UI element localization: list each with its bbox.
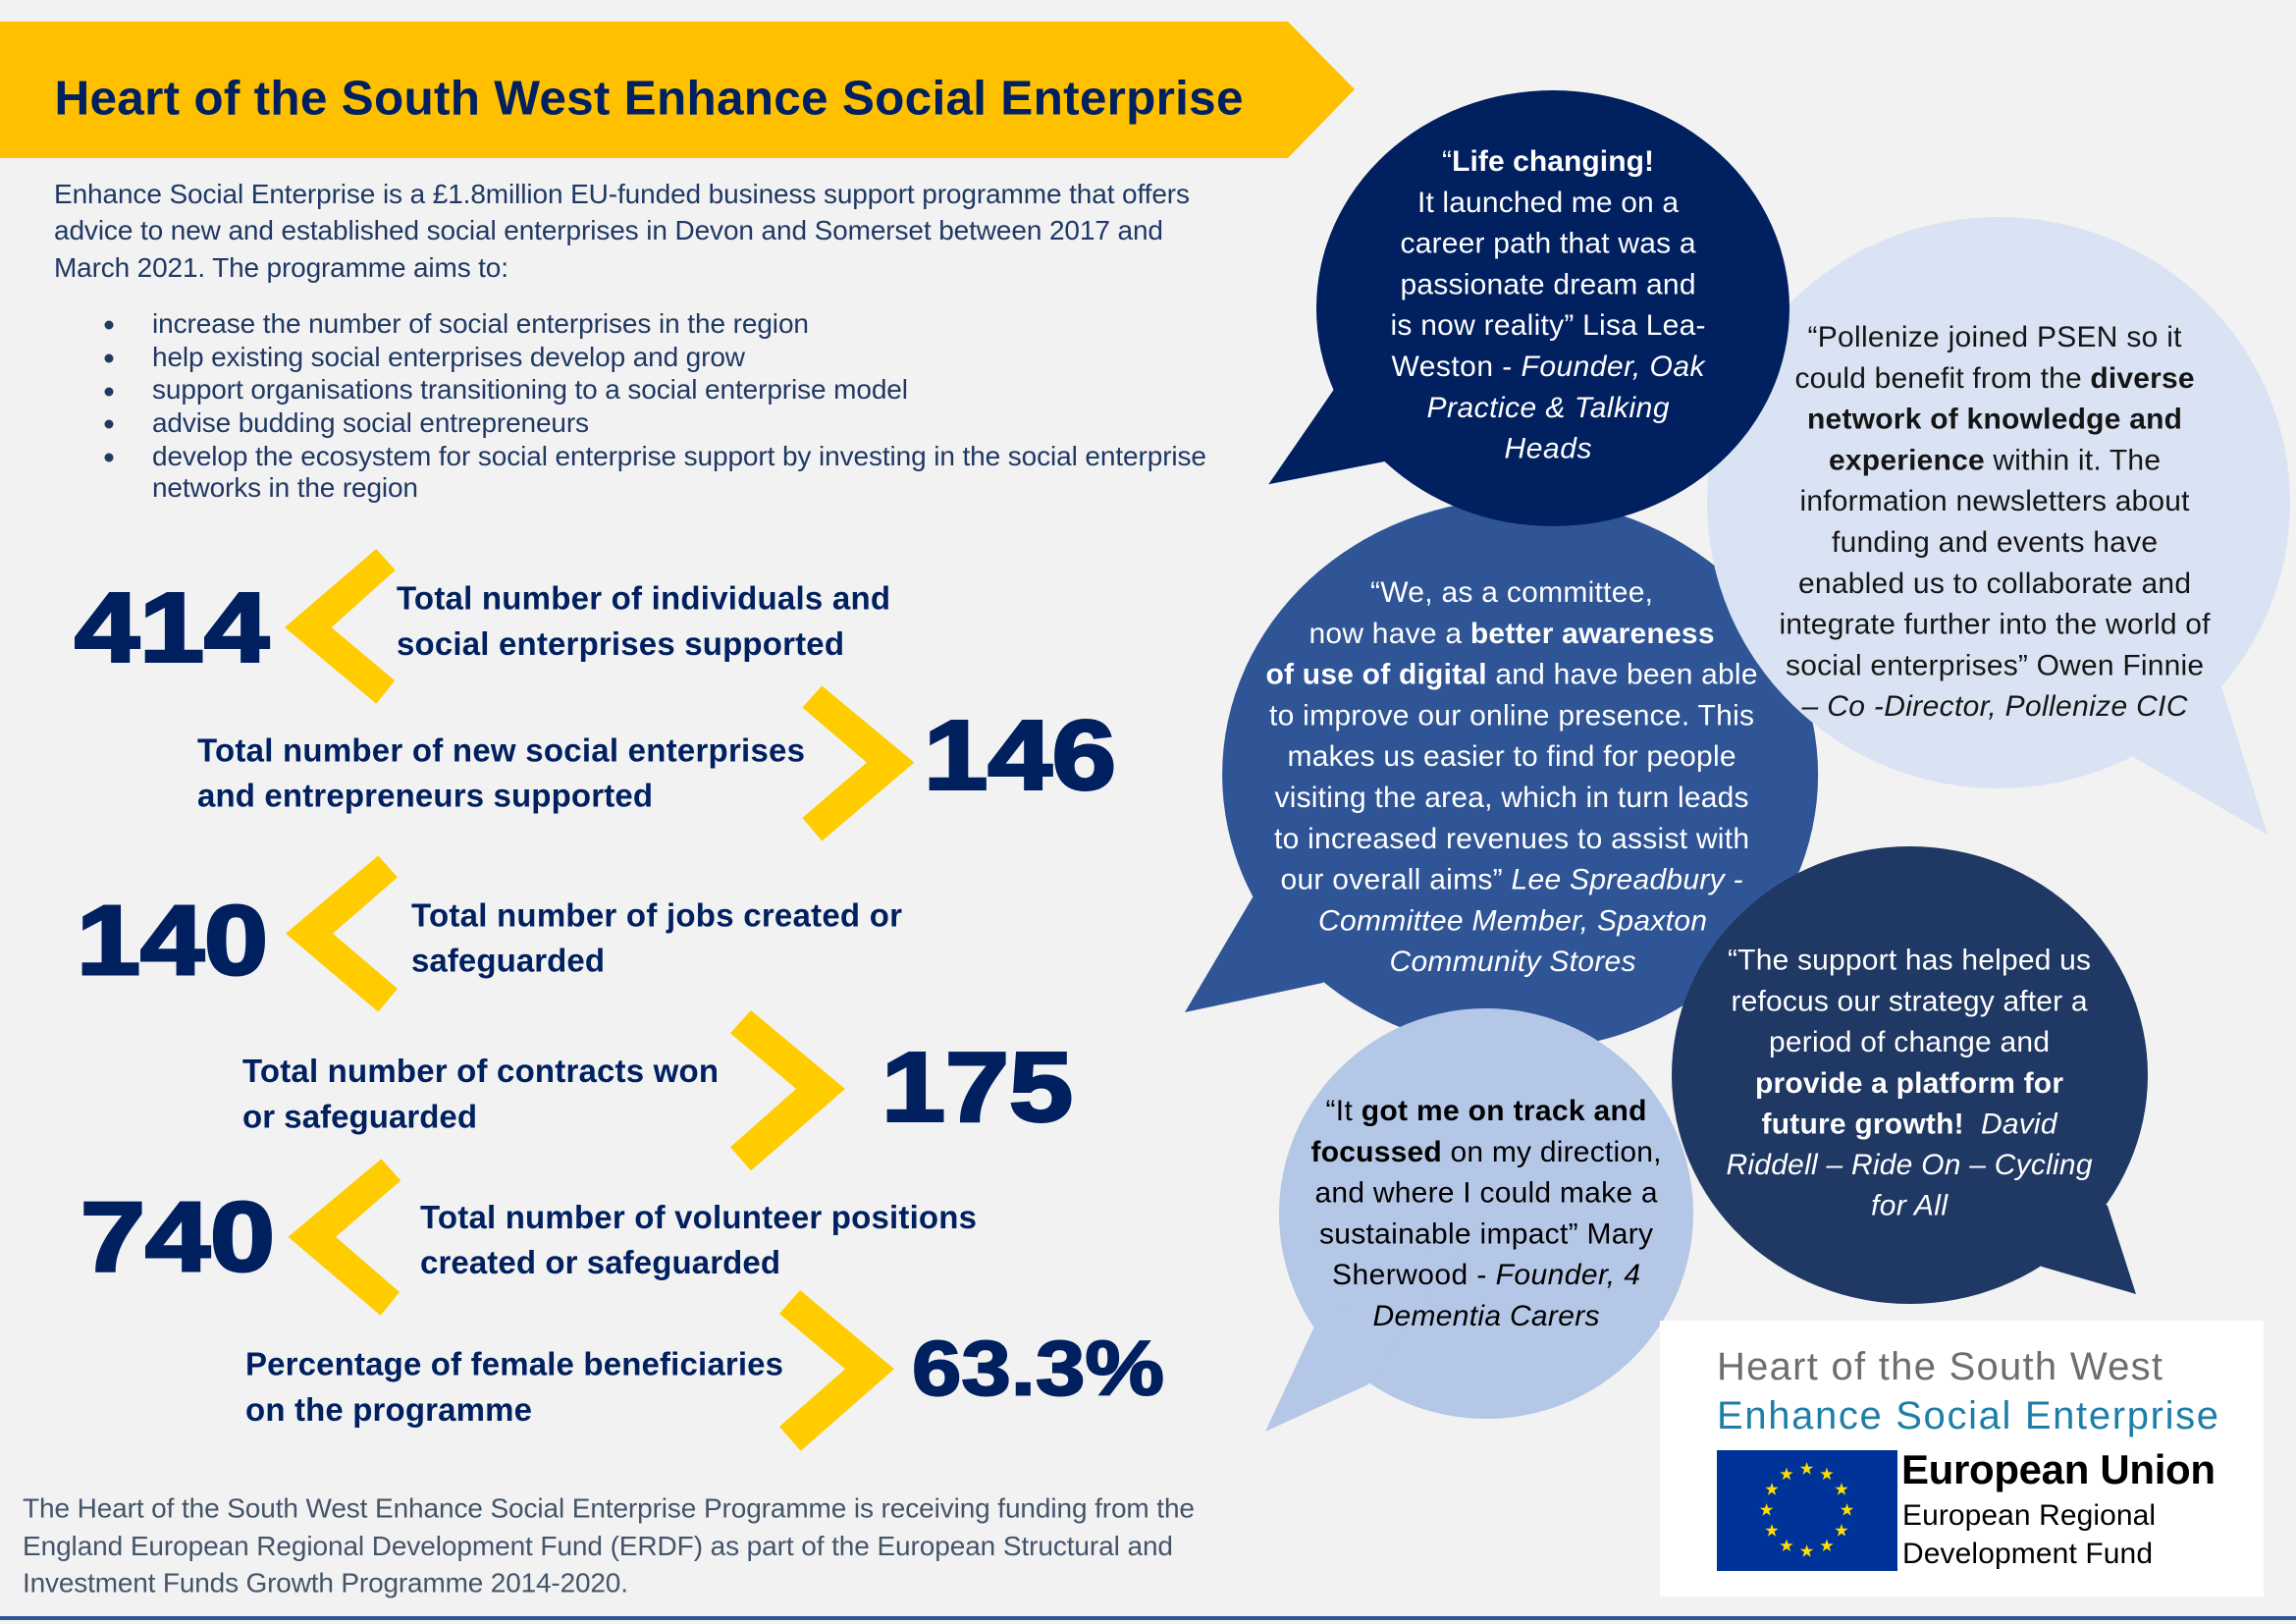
speech bubble: Lisa Lea-Weston: career path that was a	[1400, 228, 1696, 260]
stat: 140 jobs: Total number of jobs created or	[411, 897, 902, 933]
quote text: Lee Spreadbury: Committee Member, Spaxton	[1318, 904, 1707, 937]
logo panel	[1660, 1321, 2264, 1597]
speech bubble: Owen Finnie: experience within it. The	[1829, 444, 2161, 476]
EU funding text: European Union	[1901, 1446, 2216, 1492]
intro paragraph	[54, 179, 1190, 283]
quote text: Lee Spreadbury: Community Stores	[1390, 946, 1635, 978]
intro paragraph: March 2021. The programme aims to:	[54, 252, 508, 283]
stat: 175 contracts	[242, 1010, 1073, 1170]
speech bubble: Owen Finnie: funding and events have	[1832, 526, 2158, 559]
speech bubble: Lisa Lea-Weston: Weston - Founder, Oak	[1392, 351, 1706, 383]
stat: 414 individuals and social enterprises: 414	[75, 573, 269, 683]
stat: 146 new social enterprises: and entrepreneurs supported	[197, 778, 653, 813]
speech bubble: Owen Finnie: – Co -Director, Pollenize CIC	[1800, 690, 2188, 723]
stat: 146 new social enterprises	[197, 685, 1116, 840]
speech bubble: David Riddell	[1672, 846, 2148, 1304]
speech bubble: Owen Finnie: integrate further into the world of	[1779, 609, 2211, 641]
stat: 63.3% female beneficiaries: Percentage of female beneficiaries	[245, 1345, 783, 1382]
speech bubble shape: Lee Spreadbury	[1185, 499, 1818, 1051]
quote text: Lee Spreadbury: to improve our online presence. This	[1269, 699, 1754, 731]
stat: 414 individuals and social enterprises: social enterprises supported	[397, 625, 844, 662]
speech bubble: Mary Sherwood: focussed on my direction,	[1311, 1136, 1661, 1168]
stat: 63.3% female beneficiaries: 63.3%	[912, 1324, 1164, 1412]
icon: EU flag	[1717, 1450, 1897, 1571]
EU funding text: Development Fund	[1902, 1538, 2153, 1570]
speech bubble: David Riddell: provide a platform for	[1755, 1067, 2063, 1100]
stat: 146 new social enterprises: Total number of new social enterprises	[197, 732, 805, 768]
speech bubble: Mary Sherwood: Dementia Carers	[1372, 1300, 1600, 1332]
quote text: Lee Spreadbury: of use of digital and have been able	[1266, 659, 1757, 691]
speech bubble: Mary Sherwood: Sherwood - Founder, 4	[1332, 1259, 1640, 1291]
stat: 414 individuals and social enterprises	[75, 549, 890, 704]
bullet list of programme aims	[104, 308, 1206, 503]
speech bubble: David Riddell: period of change and	[1769, 1026, 2050, 1058]
speech bubble: Owen Finnie: network of knowledge and	[1807, 404, 2182, 436]
speech bubble: Mary Sherwood	[1265, 1008, 1693, 1432]
stat: 63.3% female beneficiaries	[245, 1290, 1164, 1451]
speech bubble: Owen Finnie	[1707, 217, 2290, 835]
stat: 740 volunteer positions: Total number of volunteer positions	[420, 1199, 977, 1235]
quote text: Lee Spreadbury: now have a better awareness	[1309, 618, 1714, 650]
speech bubble: Mary Sherwood: sustainable impact” Mary	[1319, 1218, 1653, 1250]
EU funding text	[1901, 1446, 2216, 1570]
speech bubble: Lisa Lea-Weston	[1268, 90, 1789, 526]
bullet list of programme aims: networks in the region	[152, 472, 418, 503]
speech bubble: Lisa Lea-Weston: passionate dream and	[1400, 268, 1696, 300]
stat: 140 jobs: safeguarded	[411, 943, 605, 978]
stat: 740 volunteer positions	[80, 1159, 977, 1316]
bullet list of programme aims: increase the number of social enterprises in the region	[152, 308, 809, 339]
speech bubble: Owen Finnie: information newsletters about	[1800, 485, 2190, 517]
speech bubble: Lisa Lea-Weston: is now reality” Lisa Lea-	[1390, 309, 1706, 342]
title banner	[0, 22, 1355, 158]
quote text: Lee Spreadbury: to increased revenues to assist with	[1274, 823, 1749, 855]
speech bubble: David Riddell: “The support has helped us	[1728, 945, 2091, 976]
quote text: Lee Spreadbury: “We, as a committee,	[1370, 576, 1653, 609]
EU funding text: European Regional	[1902, 1499, 2156, 1532]
title: Heart of the South West Enhance Social Enterprise	[55, 71, 1243, 126]
speech bubble: David Riddell: Riddell – Ride On – Cycling	[1726, 1149, 2093, 1181]
bullet list of programme aims: support organisations transitioning to a social enterprise model	[152, 374, 908, 405]
stat: 740 volunteer positions: created or safeguarded	[420, 1244, 780, 1280]
speech bubble: Lisa Lea-Weston: Practice & Talking	[1427, 392, 1670, 424]
stat: 140 jobs: 140	[77, 886, 268, 996]
speech bubble: Lisa Lea-Weston: Heads	[1504, 433, 1592, 465]
speech bubble: David Riddell: refocus our strategy after a	[1732, 985, 2088, 1017]
quote text: Lee Spreadbury: our overall aims” Lee Spreadbury -	[1280, 864, 1743, 896]
funding statement: The Heart of the South West Enhance Social Enterprise Programme is receiving funding from the	[23, 1492, 1195, 1524]
speech bubble: Lisa Lea-Weston: It launched me on a	[1417, 187, 1679, 219]
funding statement: Investment Funds Growth Programme 2014-2020.	[23, 1567, 628, 1598]
stat: 175 contracts: Total number of contracts won	[242, 1053, 719, 1089]
programme name: Heart of the South West	[1717, 1345, 2163, 1388]
bullet list of programme aims: advise budding social entrepreneurs	[152, 407, 589, 438]
stat: 140 jobs	[77, 856, 902, 1011]
speech bubble: David Riddell: for All	[1871, 1190, 1949, 1221]
stat: 175 contracts: 175	[881, 1033, 1073, 1143]
programme name: Enhance Social Enterprise	[1717, 1394, 2218, 1437]
bullet list of programme aims: develop the ecosystem for social enterprise support by investing in the social enterprise	[152, 441, 1206, 471]
stat: 414 individuals and social enterprises: Total number of individuals and	[397, 579, 890, 617]
speech bubble: Owen Finnie: could benefit from the diverse	[1794, 362, 2195, 395]
stat: 175 contracts: or safeguarded	[242, 1098, 477, 1135]
bullet list of programme aims: help existing social enterprises develop and grow	[152, 342, 746, 372]
speech bubble: Owen Finnie: social enterprises” Owen Finnie	[1786, 649, 2204, 681]
programme name	[1717, 1345, 2218, 1437]
intro paragraph: Enhance Social Enterprise is a £1.8million EU-funded business support programme that offers	[54, 179, 1190, 209]
funding statement: England European Regional Development Fund (ERDF) as part of the European Structural and	[23, 1531, 1173, 1561]
stat: 63.3% female beneficiaries: on the programme	[245, 1391, 532, 1428]
quote text: Lee Spreadbury: visiting the area, which in turn leads	[1274, 782, 1749, 814]
stat: 740 volunteer positions: 740	[80, 1182, 275, 1292]
speech bubble: Owen Finnie: “Pollenize joined PSEN so it	[1808, 321, 2182, 353]
speech bubble: Lisa Lea-Weston: “Life changing!	[1442, 145, 1654, 178]
stat: 146 new social enterprises: 146	[924, 701, 1116, 811]
speech bubble: David Riddell: future growth! David	[1761, 1108, 2058, 1141]
quote text: Lee Spreadbury	[1266, 576, 1757, 978]
speech bubble: Mary Sherwood: and where I could make a	[1315, 1177, 1658, 1210]
speech bubble: Owen Finnie: enabled us to collaborate and	[1798, 568, 2191, 600]
quote text: Lee Spreadbury: makes us easier to find for people	[1288, 740, 1735, 773]
funding statement	[23, 1492, 1195, 1598]
speech bubble: Mary Sherwood: “It got me on track and	[1325, 1095, 1647, 1127]
intro paragraph: advice to new and established social enterprises in Devon and Somerset between 2017 and	[54, 215, 1163, 245]
